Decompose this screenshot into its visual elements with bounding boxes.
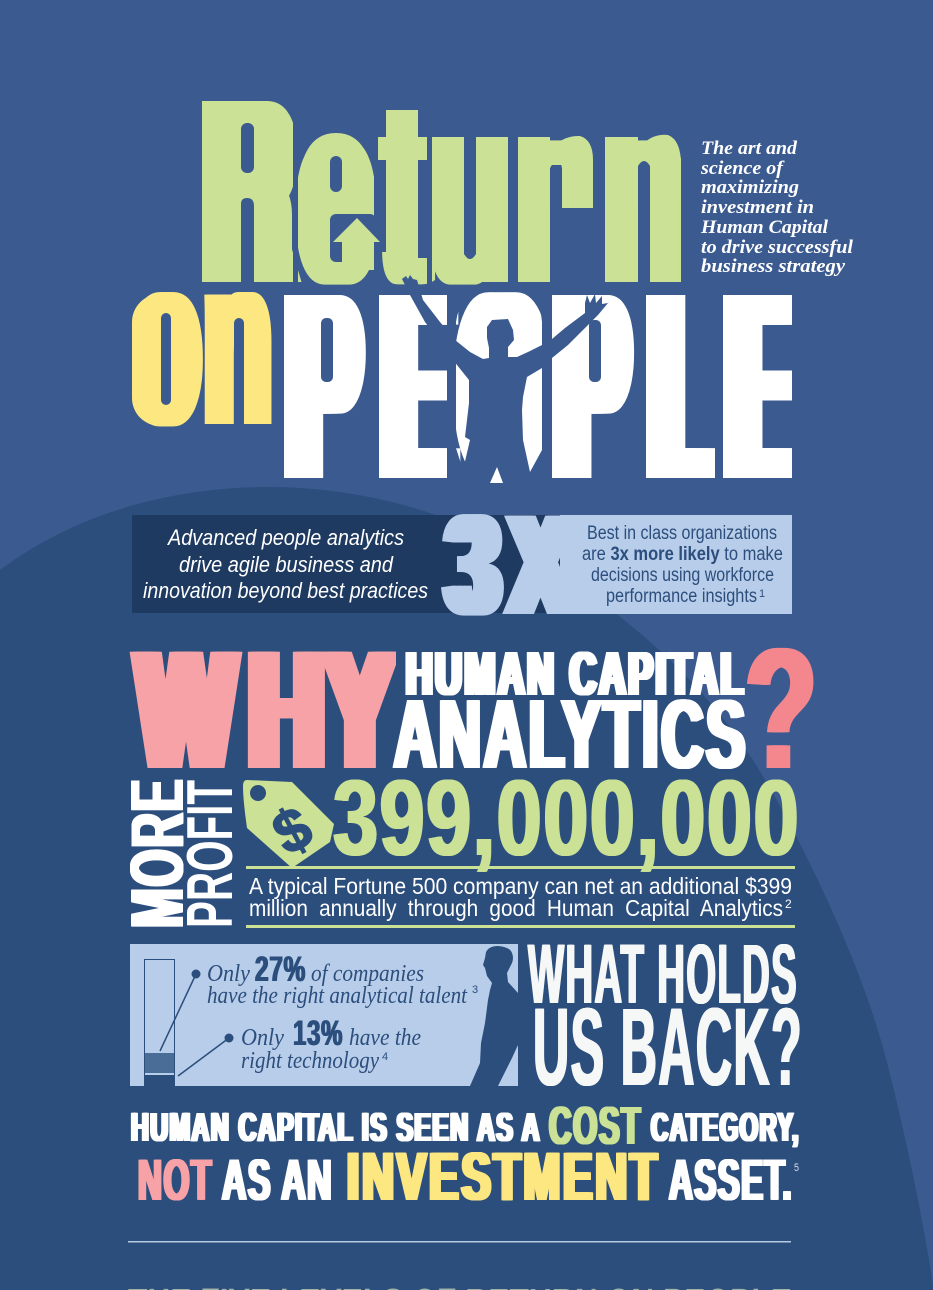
vertical label: more profit: MORE [115,778,199,928]
subtitle [700,138,854,277]
statement text: innovation beyond best practices [143,578,428,603]
panel: best in class [560,515,792,614]
icon: person silhouette [470,946,518,1086]
statement: investment asset: AS AN [222,1148,333,1213]
callout: 27 percent [160,950,478,1051]
title: on: on [133,203,271,477]
subtitle: to drive successful [701,237,854,258]
statement text: Advanced people analytics [166,525,404,550]
callout: 27 percent: of companies [311,961,424,987]
subtitle: business strategy [701,256,846,277]
panel: 3X statistic [132,486,792,645]
statement text [143,525,428,603]
title: PEOPLE: PEOPLE [288,237,794,535]
profit description: 2 [785,897,792,911]
vertical label: more profit: PROFIT [173,780,246,928]
callout: 13 percent: 4 [382,1051,388,1063]
profit description: A typical Fortune 500 company can net an additional $399 [249,873,792,899]
callout: 13 percent: Only [241,1025,284,1051]
big 3X: 3X [448,486,571,645]
statement: cost category: COST [549,1096,642,1156]
statement: cost category: HUMAN CAPITAL IS SEEN AS A [131,1104,541,1150]
statement: investment asset: ASSET. [669,1148,793,1213]
best in class text: Best in class organizations [587,523,777,544]
callout: 13 percent: right technology [241,1048,379,1074]
letter r ear [548,136,593,208]
best in class text: 1 [759,588,765,600]
subtitle: Human Capital [700,217,829,238]
panel: skills and technology gap [130,944,518,1086]
chart: thermometer bar [144,960,174,1086]
vertical label: more profit [115,778,246,928]
statement: investment asset [138,1138,799,1215]
question mark: ? [744,614,815,805]
subtitle: investment in [701,197,814,218]
best in class text: decisions using workforce [591,565,774,586]
heading: what holds us back [528,927,803,1109]
callout: 27 percent: have the right analytical talent [207,983,468,1009]
heading: WHY: WHY [138,615,394,804]
icon: price tag [243,780,334,868]
subtitle: maximizing [701,177,799,198]
best in class text: performance insights [606,586,757,607]
statement: investment asset: NOT [138,1148,213,1213]
callout: 13 percent [178,1014,421,1076]
subtitle: science of [700,158,785,179]
statement: investment asset: INVESTMENT [347,1138,660,1215]
callout: 13 percent: have the [349,1025,421,1051]
callout: 27 percent: 27% [255,950,306,989]
statement: investment asset: 5 [794,1162,799,1174]
profit description [246,866,795,928]
callout: 27 percent: Only [207,961,250,987]
icon: price tag: $ [262,793,323,868]
icon: person with raised arms silhouette [402,275,608,486]
best in class text: are 3x more likely to make [582,544,783,565]
icon: upward arrow in the letter e [333,218,380,270]
statement text: drive agile business and [179,552,394,577]
best in class text [582,523,783,607]
panel: analytics statement [132,515,560,613]
profit description: million annually through good Human Capital Analytics [249,895,783,921]
statement: cost category: CATEGORY, [651,1104,800,1150]
subtitle: The art and [701,138,798,159]
callout: 27 percent: 3 [472,984,478,996]
heading: Human Capital Analytics [394,640,748,789]
title: Return: Return [206,45,680,339]
callout: 13 percent: 13% [293,1014,343,1053]
